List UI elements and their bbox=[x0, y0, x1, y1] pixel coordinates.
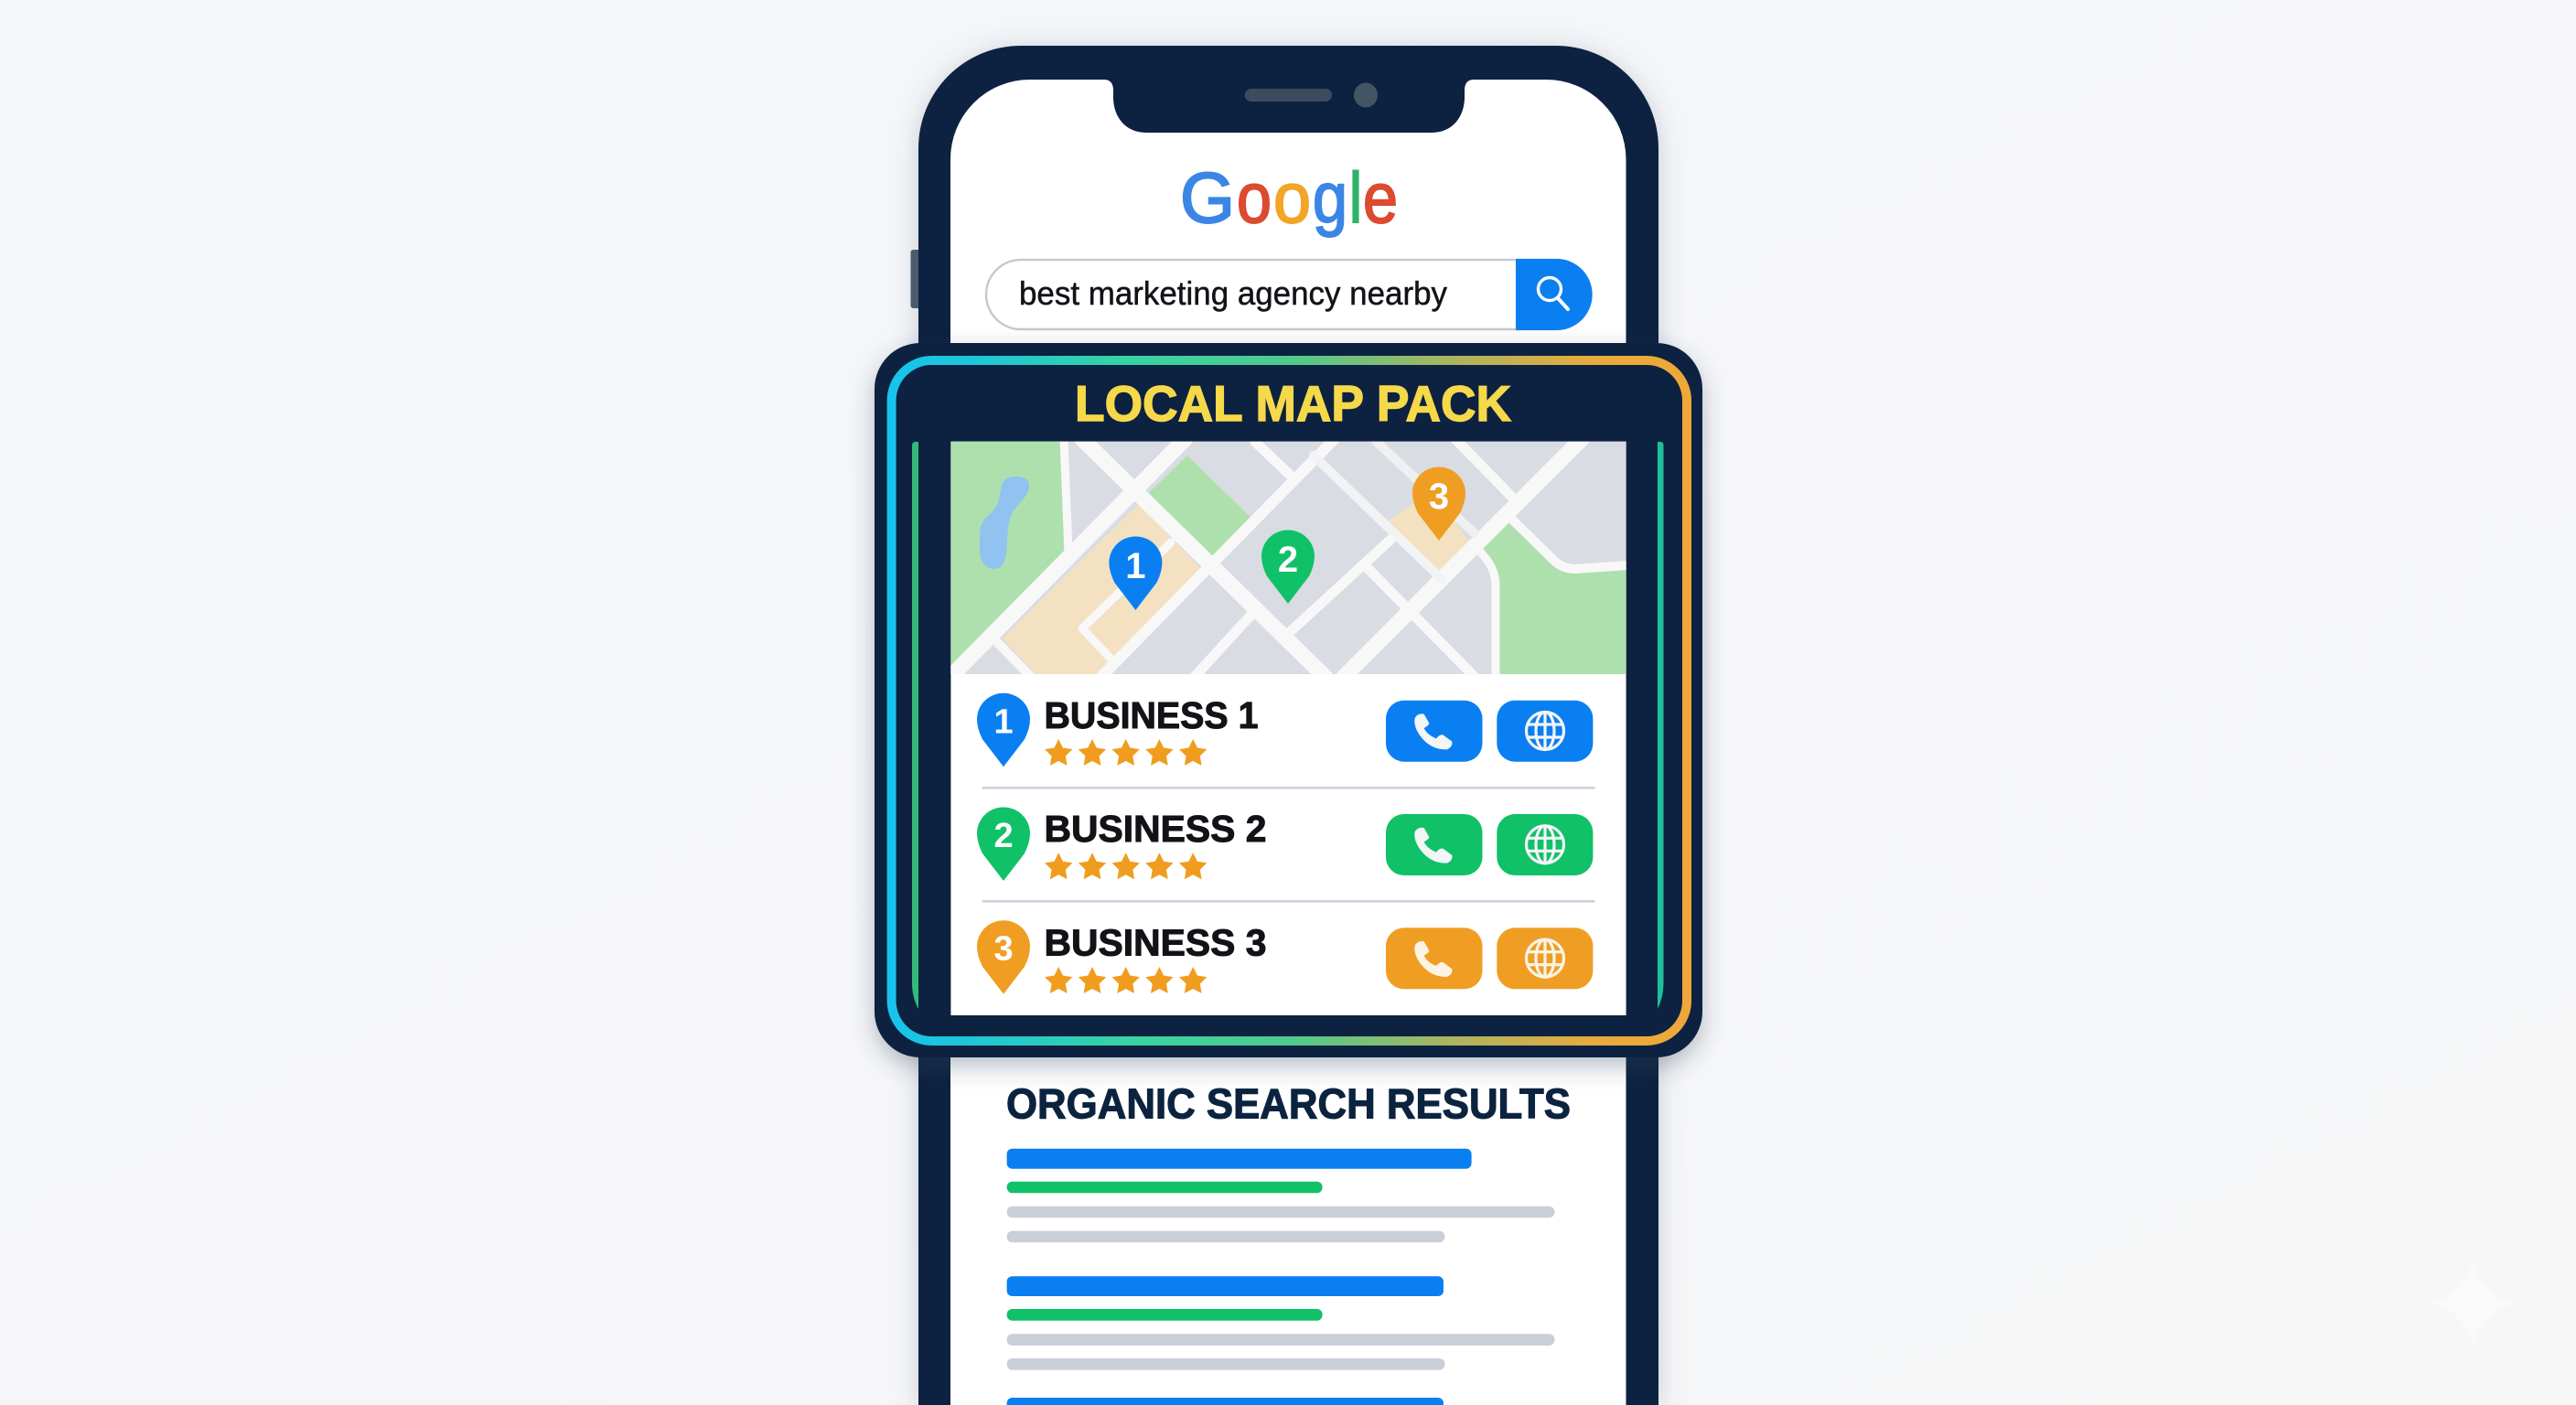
divider bbox=[982, 900, 1595, 903]
inner accent right bbox=[1658, 442, 1663, 1009]
website button bbox=[1497, 814, 1593, 875]
google logo: o bbox=[1237, 157, 1272, 238]
stars bbox=[1045, 739, 1207, 766]
map pin 3 bbox=[1412, 467, 1465, 541]
white content panel bbox=[950, 442, 1626, 1015]
inner accent left bbox=[912, 442, 918, 1009]
side button bbox=[911, 250, 922, 308]
map pin 1: 1 bbox=[1125, 546, 1146, 586]
pin bbox=[977, 693, 1030, 767]
list row: business 3 bbox=[977, 920, 1593, 994]
map pin 2: 2 bbox=[1278, 540, 1298, 580]
map beige areas bbox=[1003, 503, 1470, 674]
google logo: G bbox=[1180, 157, 1235, 238]
result 1 bbox=[1007, 1149, 1554, 1242]
pin: 2 bbox=[993, 817, 1014, 855]
call button bbox=[1386, 701, 1482, 762]
heading: LOCAL MAP PACK bbox=[1075, 375, 1511, 432]
list row: business 1 bbox=[977, 693, 1593, 767]
google logo: l bbox=[1349, 157, 1362, 238]
pin bbox=[977, 807, 1030, 881]
result 2 bbox=[1007, 1276, 1554, 1370]
website button bbox=[1497, 701, 1593, 762]
map pin 3: 3 bbox=[1429, 477, 1449, 517]
phone screen bbox=[950, 80, 1626, 1405]
pin: 3 bbox=[993, 930, 1014, 969]
result 3 bbox=[1007, 1398, 1444, 1405]
speaker bbox=[1245, 89, 1332, 102]
website button bbox=[1497, 928, 1593, 989]
search query: best marketing agency nearby bbox=[1019, 274, 1447, 312]
lake bbox=[980, 477, 1029, 569]
stars bbox=[1045, 853, 1207, 879]
map pin 2 bbox=[1261, 531, 1315, 604]
name: BUSINESS 2 bbox=[1045, 808, 1266, 850]
google logo: e bbox=[1363, 157, 1398, 238]
panel frame bbox=[875, 343, 1702, 1057]
google logo bbox=[1180, 157, 1398, 238]
divider bbox=[982, 787, 1595, 789]
map roads bbox=[951, 439, 1628, 677]
google logo: g bbox=[1313, 157, 1347, 238]
heading: ORGANIC SEARCH RESULTS bbox=[1006, 1079, 1571, 1127]
stars bbox=[1045, 967, 1207, 993]
icon: magnifier bbox=[1539, 278, 1568, 309]
camera bbox=[1354, 82, 1378, 108]
map parks bbox=[950, 441, 1626, 675]
call button bbox=[1386, 814, 1482, 875]
search button bbox=[1516, 259, 1593, 330]
panel: local map pack bbox=[875, 343, 1702, 1057]
pin: 1 bbox=[993, 702, 1014, 741]
call button bbox=[1386, 928, 1482, 989]
phone body bbox=[918, 46, 1658, 1405]
gradient ring bbox=[892, 360, 1687, 1041]
name: BUSINESS 1 bbox=[1045, 694, 1259, 736]
list row: business 2 bbox=[977, 807, 1593, 881]
google logo: o bbox=[1273, 157, 1311, 238]
pin bbox=[977, 920, 1030, 994]
search bar bbox=[986, 259, 1593, 330]
map pin 1 bbox=[1109, 536, 1162, 610]
phone bbox=[911, 46, 1658, 1405]
panel: organic search results bbox=[1006, 1079, 1571, 1405]
map bbox=[950, 439, 1628, 677]
watermark sparkle bbox=[2429, 1260, 2517, 1347]
name: BUSINESS 3 bbox=[1045, 921, 1266, 963]
